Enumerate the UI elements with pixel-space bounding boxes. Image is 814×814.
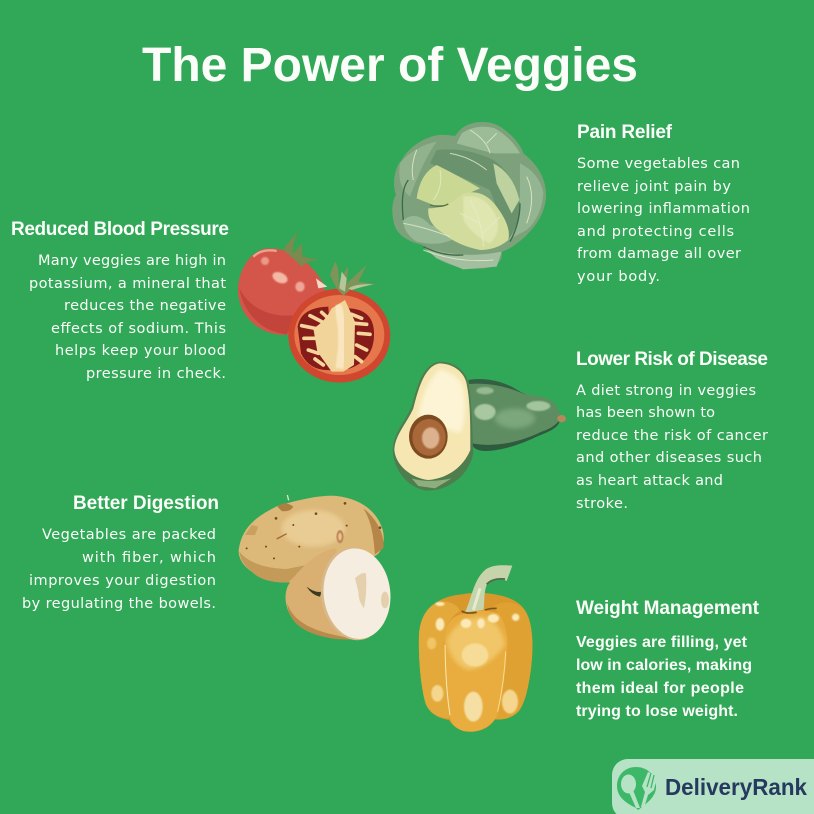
panel: weight management: [576, 598, 760, 720]
heading: better digestion: Better Digestion: [73, 493, 219, 514]
center lobe: [444, 611, 507, 732]
text block: lower risk of disease: [576, 383, 768, 512]
front stem: [330, 262, 377, 296]
text block: better digestion: [22, 527, 216, 612]
icon: spoon and fork: [617, 767, 657, 810]
back stem: [283, 232, 320, 267]
logo wordmark: DeliveryRank: [665, 774, 807, 800]
whole avocado: [468, 379, 560, 451]
panel: pain relief: [577, 122, 750, 285]
logo badge: [612, 759, 814, 814]
text block: reduced blood pressure: pressure in check.: [86, 366, 226, 382]
stem: [465, 565, 512, 612]
heading: pain relief: Pain Relief: [577, 122, 673, 143]
text block: weight management: low in calories, making: [576, 657, 752, 674]
text block: reduced blood pressure: helps keep your blood: [55, 343, 226, 359]
text block: weight management: trying to lose weight.: [576, 703, 738, 720]
text block: weight management: Veggies are filling, yet: [576, 634, 748, 651]
text block: lower risk of disease: stroke.: [576, 496, 628, 512]
text block: reduced blood pressure: [29, 253, 226, 382]
left lobe: [419, 602, 460, 718]
whole potato: [239, 496, 384, 582]
text block: pain relief: [577, 156, 750, 285]
cut avocado half: [393, 362, 473, 491]
panel: reduced blood pressure: [11, 219, 229, 382]
back tomato: [238, 248, 325, 335]
text block: reduced blood pressure: Many veggies are high in: [38, 253, 226, 269]
title: The Power of Veggies: [142, 39, 638, 92]
text block: lower risk of disease: A diet strong in veggies: [576, 383, 756, 399]
text block: pain relief: relieve joint pain by: [577, 179, 731, 195]
panel: lower risk of disease: [576, 349, 768, 512]
logo: DeliveryRank: [612, 759, 814, 814]
heading: lower risk of disease: Lower Risk of Disease: [576, 349, 768, 370]
front tomato: [288, 289, 390, 383]
text block: better digestion: improves your digestion: [29, 573, 216, 589]
text block: pain relief: lowering inflammation: [577, 201, 750, 217]
text block: reduced blood pressure: potassium, a mineral that: [29, 276, 226, 292]
heading: weight management: Weight Management: [576, 598, 760, 619]
text block: pain relief: your body.: [577, 269, 660, 285]
text block: better digestion: with fiber, which: [82, 550, 216, 566]
icon: cabbage: [392, 122, 546, 269]
right lobe: [493, 602, 532, 719]
text block: reduced blood pressure: reduces the negative: [64, 298, 226, 314]
text block: weight management: [576, 634, 752, 720]
icon: tomatoes: [238, 232, 390, 383]
silhouette: [419, 593, 532, 732]
text block: pain relief: Some vegetables can: [577, 156, 740, 172]
icon: yellow bell pepper: [419, 565, 532, 732]
text block: lower risk of disease: reduce the risk of cancer: [576, 428, 768, 444]
icon: potatoes: [239, 495, 395, 644]
icon: avocado: [393, 362, 566, 491]
text block: pain relief: and protecting cells: [577, 224, 734, 240]
text block: reduced blood pressure: effects of sodium. This: [51, 321, 226, 337]
text block: lower risk of disease: and other diseases such: [576, 450, 762, 466]
text block: pain relief: from damage all over: [577, 246, 741, 262]
text block: lower risk of disease: as heart attack and: [576, 473, 723, 489]
cut potato: [286, 548, 357, 639]
text block: weight management: them ideal for people: [576, 680, 744, 697]
text block: better digestion: by regulating the bowels.: [22, 596, 216, 612]
text block: better digestion: Vegetables are packed: [42, 527, 216, 543]
text block: lower risk of disease: has been shown to: [576, 405, 715, 421]
panel: better digestion: [22, 493, 219, 612]
heading: reduced blood pressure: Reduced Blood Pressure: [11, 219, 229, 240]
